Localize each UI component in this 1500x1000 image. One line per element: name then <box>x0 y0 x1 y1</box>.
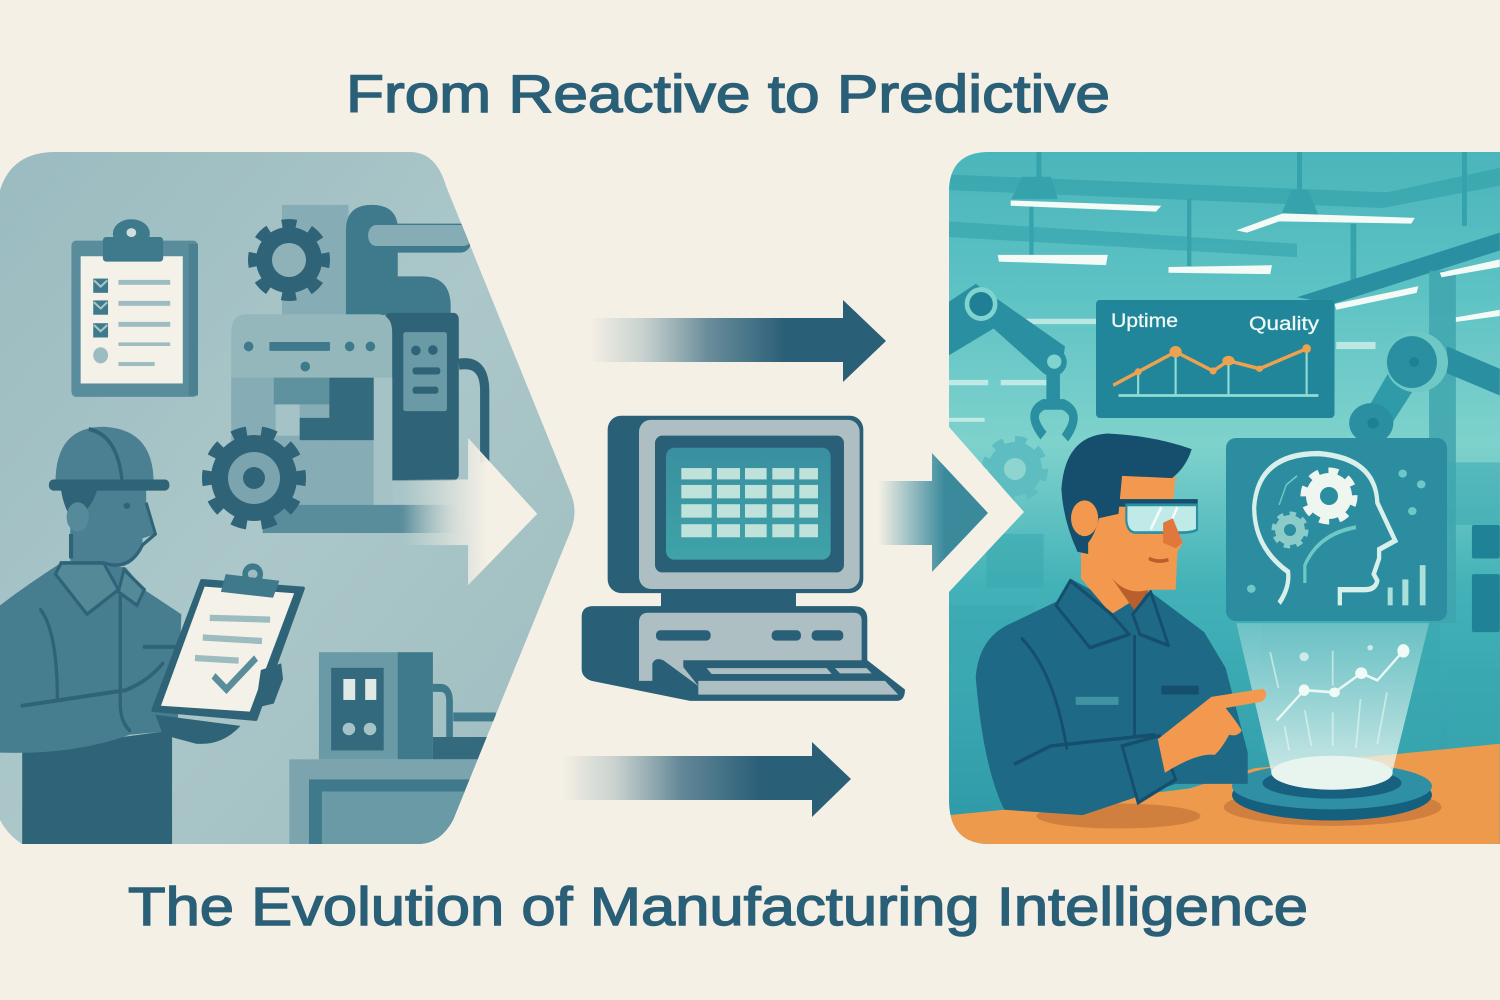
hologram projector with chart <box>1232 623 1432 820</box>
icon: wall clipboard checklist <box>71 219 198 397</box>
pointing hand <box>1158 689 1266 773</box>
desk <box>949 744 1500 850</box>
brain head outline <box>1247 454 1426 605</box>
machine: large press <box>231 205 485 533</box>
icon: top gear <box>247 218 331 302</box>
floating chart <box>1270 651 1403 750</box>
handheld clipboard <box>153 563 303 719</box>
projector base <box>1232 763 1432 820</box>
light cone <box>1236 623 1429 775</box>
arrow: top <box>590 300 886 382</box>
panel: predictive smart factory <box>940 150 1500 850</box>
machine: lower control unit <box>289 652 496 847</box>
panel: reactive manual factory <box>0 150 580 850</box>
icon: big white gear <box>1304 471 1354 521</box>
figure: engineer with smart glasses <box>976 433 1266 815</box>
icon: small gear <box>1274 514 1306 546</box>
worker body <box>0 489 240 846</box>
engineer collar <box>1056 581 1168 648</box>
robot arm: right <box>1349 332 1500 443</box>
label: quality: Quality <box>1249 314 1320 335</box>
worker head and hat <box>49 427 169 532</box>
engineer face and hair <box>1061 433 1192 614</box>
title: From Reactive to Predictive <box>346 65 1110 124</box>
robot arm: left <box>949 284 1073 438</box>
data table on screen <box>681 468 818 537</box>
icon: large gear <box>201 425 307 531</box>
brain AI panel <box>1226 438 1447 621</box>
base unit and keyboard <box>582 591 905 701</box>
monitor <box>608 416 863 593</box>
factory background: ceiling, lights, beams <box>949 150 1500 753</box>
arrow: bottom <box>562 742 851 817</box>
subtitle: The Evolution of Manufacturing Intelligence <box>128 877 1308 937</box>
line chart <box>1113 344 1318 396</box>
arrow: pale fading arrow <box>403 438 537 585</box>
icon: retro computer <box>582 416 905 701</box>
icon: faded background gear <box>986 440 1044 498</box>
figure: worker with hard hat and clipboard <box>0 427 303 846</box>
smart glasses <box>1119 499 1198 548</box>
dashboard: uptime and quality chart <box>1096 300 1334 418</box>
label: uptime: Uptime <box>1111 311 1178 332</box>
engineer shirt <box>976 579 1248 815</box>
arrow: middle into predictive panel <box>878 453 988 572</box>
